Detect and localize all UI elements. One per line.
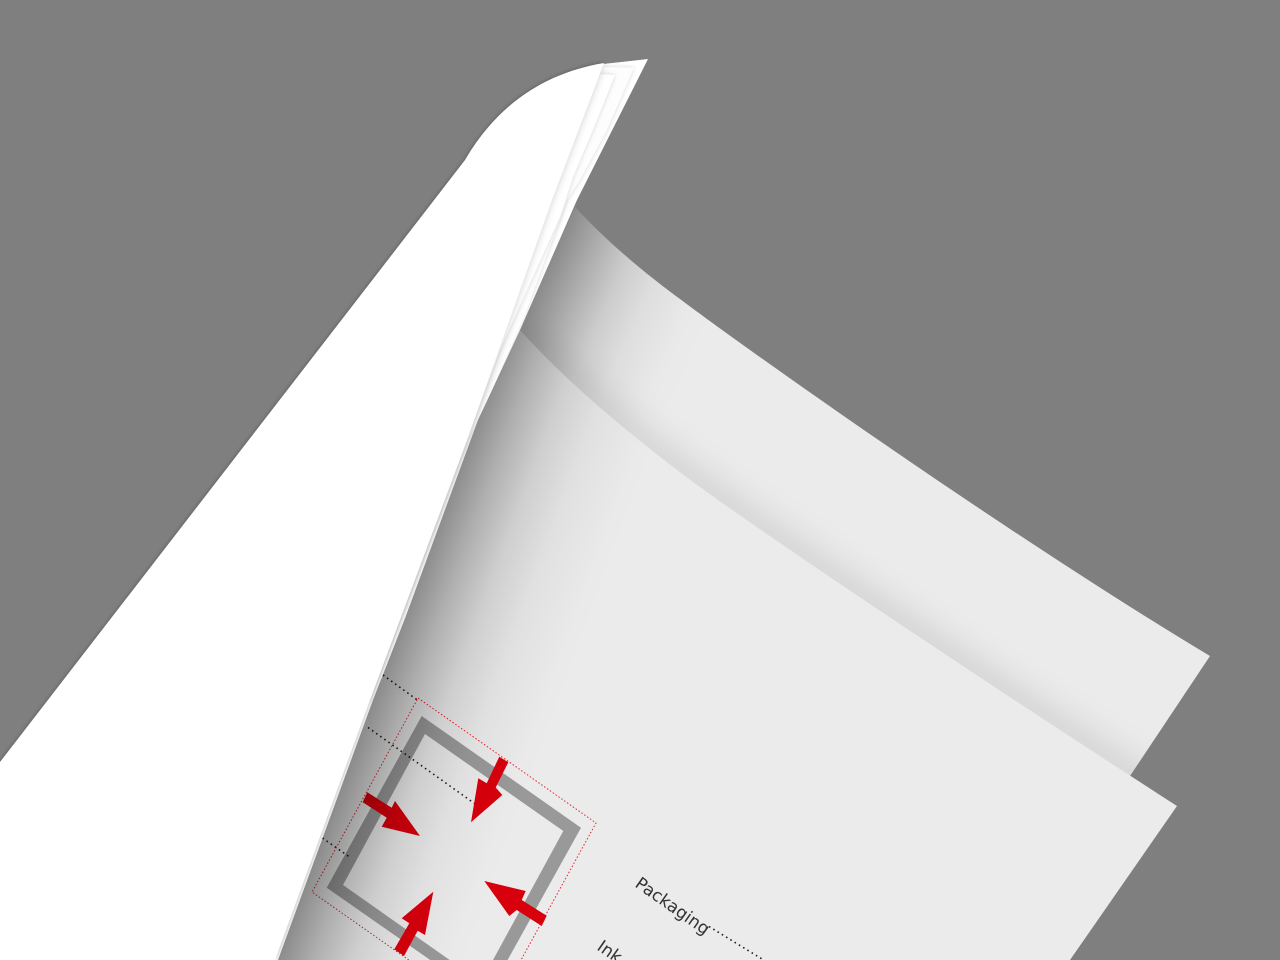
main page shadow (275, 64, 606, 960)
middle sheet (394, 67, 634, 634)
front sheet (278, 327, 1177, 960)
turned page shadow (0, 63, 604, 960)
back sheet (522, 208, 1210, 776)
stacked inner sheets (275, 64, 634, 960)
arrow: bottom left (394, 892, 433, 956)
crop frame (312, 698, 596, 960)
arrow: top right (471, 757, 508, 822)
grey square outline (327, 716, 581, 960)
turned pages stack (0, 59, 648, 960)
inner sheet shadow (370, 72, 616, 700)
outer sheet (240, 59, 648, 960)
arrow: left (363, 792, 420, 836)
label: Packaging: Packaging (631, 874, 713, 940)
main white page (0, 63, 604, 960)
inner sheet (470, 74, 615, 430)
dotted leader lines (322, 675, 762, 959)
arrow: bottom right (484, 881, 547, 926)
spine shading (278, 327, 1177, 960)
middle sheet shadow (275, 67, 634, 960)
